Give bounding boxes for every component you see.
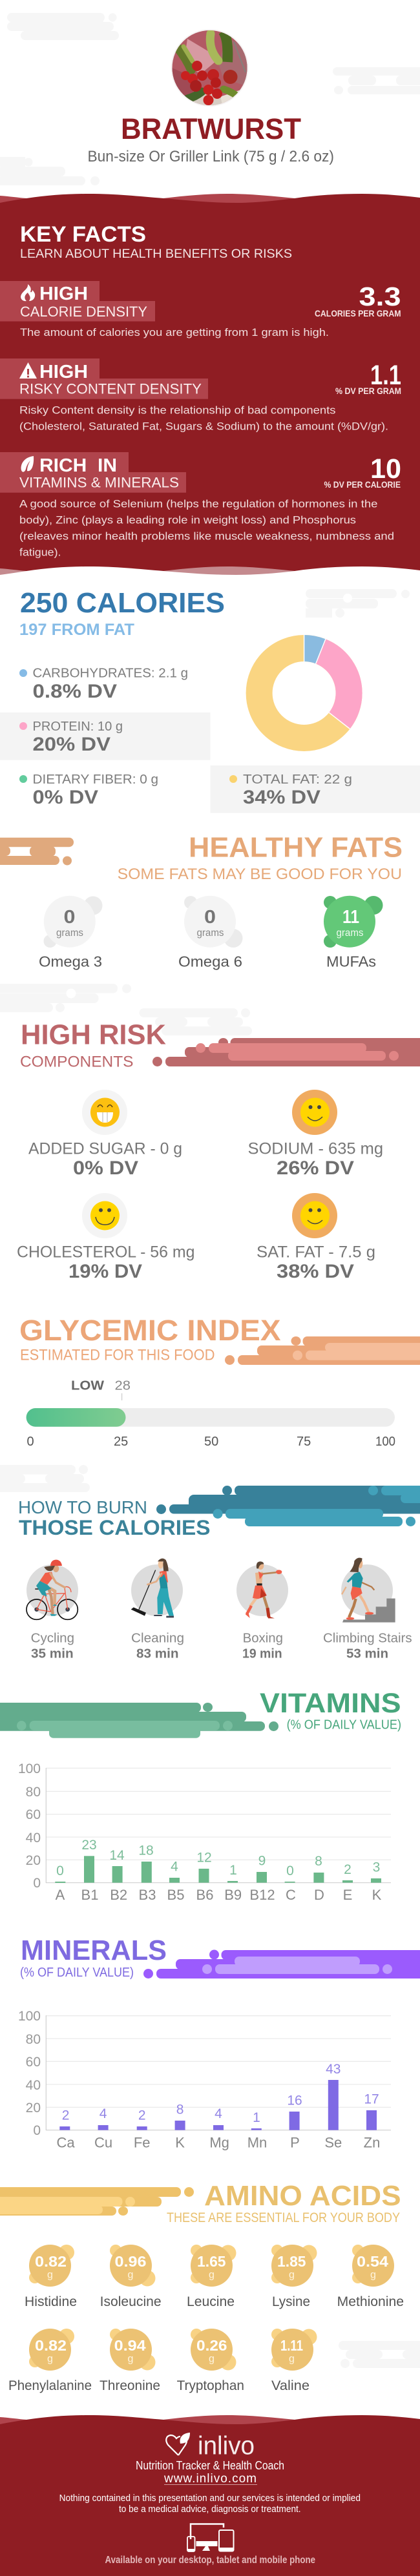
- fat: omega 6: 0: [204, 907, 216, 928]
- title: BRATWURST: [121, 112, 301, 145]
- activity: climbing stairs: Climbing Stairs: [323, 1632, 412, 1646]
- heading: minerals: MINERALS: [21, 1935, 167, 1966]
- bar chart: vitamins: 2: [344, 1862, 352, 1877]
- bar chart: minerals: K: [175, 2134, 185, 2150]
- bar chart: vitamins: B2: [110, 1887, 127, 1903]
- icon: smiling face: [300, 1201, 330, 1230]
- amino: valine: [271, 2329, 317, 2393]
- risky content density block: RISKY CONTENT DENSITY: [19, 381, 202, 397]
- calorie density block: HIGH: [39, 284, 88, 304]
- vitamins and minerals block: fatigue).: [19, 546, 61, 559]
- heading: those calories: THOSE CALORIES: [19, 1516, 211, 1539]
- vitamins and minerals block: (releaves minor health problems like muscle weakness, numbness and: [19, 530, 394, 543]
- bar chart: minerals: Se: [324, 2134, 342, 2150]
- activity: cycling: 35 min: [31, 1647, 74, 1661]
- bar chart: minerals: 17: [364, 2092, 379, 2107]
- amino: methionine: [337, 2245, 404, 2309]
- decorative cloud near amino acids: [339, 2341, 420, 2368]
- disclaimer: Nothing contained in this presentation and our services is intended or implied: [59, 2493, 361, 2504]
- bar chart: minerals: Fe: [134, 2134, 151, 2150]
- gauge: 0: [27, 1435, 34, 1449]
- activity: climbing stairs: [323, 1558, 412, 1661]
- bar chart: vitamins: 23: [81, 1838, 97, 1853]
- bar chart: vitamins: B12: [249, 1887, 275, 1903]
- bar chart: vitamins: 12: [196, 1851, 212, 1865]
- macronutrient: carbohydrates: 0.8% DV: [32, 681, 117, 702]
- macronutrient: dietary fiber: 0% DV: [32, 787, 98, 808]
- calorie density block: CALORIES PER GRAM: [315, 308, 401, 318]
- amino: lysine: g: [289, 2270, 295, 2281]
- macronutrient: total fat: TOTAL FAT: 22 g: [243, 773, 352, 787]
- bar chart: vitamins: B9: [224, 1887, 242, 1903]
- bar chart: minerals: 2: [138, 2108, 146, 2123]
- bar chart: vitamins: 80: [26, 1785, 41, 1800]
- bar chart: minerals: 60: [26, 2055, 41, 2070]
- amino: threonine: Threonine: [100, 2378, 160, 2393]
- subheading: (% OF DAILY VALUE): [287, 1718, 401, 1732]
- panel: calories and macronutrients: [0, 588, 420, 813]
- component: sodium: 26% DV: [277, 1158, 354, 1179]
- fat: MUFAs: 11: [342, 907, 359, 928]
- bar chart: vitamins: 40: [26, 1831, 41, 1845]
- calorie density block: CALORIE DENSITY: [20, 304, 147, 320]
- subheading: components: COMPONENTS: [20, 1054, 133, 1071]
- component: saturated fat: SAT. FAT - 7.5 g: [257, 1243, 375, 1262]
- bar chart: minerals: 4: [215, 2106, 222, 2121]
- disclaimer: [59, 2493, 361, 2515]
- macronutrient: protein: [0, 712, 211, 760]
- vitamins and minerals block: body), Zinc (plays a leading role in weight loss) and Phosphorus: [19, 514, 356, 526]
- decorative clouds above high risk: [0, 984, 252, 1035]
- amino: valine: g: [289, 2354, 295, 2365]
- icon: cyclist: [26, 1560, 78, 1619]
- panel: key facts: [0, 194, 420, 579]
- banner: amino acids: [0, 2187, 194, 2216]
- panel: how to burn those calories: [18, 1486, 420, 1661]
- heading: high risk: HIGH RISK: [21, 1020, 167, 1051]
- gauge: [26, 1379, 395, 1449]
- subheading: (% OF DAILY VALUE): [20, 1966, 134, 1980]
- subtitle: Bun-size Or Griller Link (75 g / 2.6 oz): [88, 148, 334, 165]
- subheading: calories from fat: 197 FROM FAT: [19, 621, 134, 639]
- panel: healthy fats: [0, 833, 403, 970]
- amino: tryptophan: 0.26: [196, 2337, 227, 2354]
- heading: key facts: KEY FACTS: [20, 222, 146, 247]
- bar chart: vitamins: 9: [258, 1854, 266, 1869]
- activity: boxing: 19 min: [242, 1647, 282, 1661]
- component: cholesterol: 19% DV: [68, 1261, 142, 1282]
- bar chart: vitamins: D: [314, 1887, 324, 1903]
- amino: leucine: Leucine: [187, 2294, 235, 2309]
- panel: high risk components: [17, 1020, 420, 1282]
- bar chart: minerals: Mg: [209, 2134, 229, 2150]
- heading: glycemic index: GLYCEMIC INDEX: [19, 1314, 281, 1347]
- heading: vitamins: VITAMINS: [260, 1688, 401, 1719]
- activity: cleaning: [131, 1559, 184, 1661]
- bar chart: vitamins: E: [343, 1887, 352, 1903]
- vitamins and minerals block: [0, 452, 401, 559]
- bar chart: minerals: 43: [326, 2062, 341, 2077]
- bar chart: minerals: 8: [176, 2103, 184, 2117]
- amino: leucine: 1.65: [197, 2253, 226, 2270]
- icon: smiling face: [300, 1098, 330, 1127]
- amino: tryptophan: [177, 2329, 244, 2393]
- panel: minerals: [18, 1935, 420, 2150]
- amino: histidine: 0.82: [35, 2253, 67, 2270]
- banner: high risk: [152, 1038, 420, 1066]
- amino: leucine: g: [209, 2270, 215, 2281]
- activity: cleaning: 83 min: [136, 1647, 178, 1661]
- risky density value: 1.1: [370, 360, 401, 391]
- bar chart: vitamins: B5: [167, 1887, 184, 1903]
- gauge: 25: [114, 1435, 128, 1449]
- macronutrient: total fat: 34% DV: [243, 787, 320, 808]
- icon: person on stairs: [342, 1558, 395, 1623]
- vitamins value: 10: [370, 453, 401, 484]
- bar chart: vitamins: B3: [139, 1887, 156, 1903]
- activity: cleaning: Cleaning: [131, 1632, 184, 1646]
- component: saturated fat: 38% DV: [277, 1261, 354, 1282]
- icon: leaf: [21, 456, 34, 472]
- bar chart: minerals: 0: [33, 2123, 41, 2138]
- subheading: ESTIMATED FOR THIS FOOD: [20, 1347, 215, 1364]
- bar chart: vitamins: K: [372, 1887, 382, 1903]
- gauge: 75: [297, 1435, 311, 1449]
- bar chart: vitamins: 0: [33, 1876, 41, 1891]
- banner: minerals: [143, 1949, 420, 1979]
- amino: leucine: [187, 2245, 236, 2309]
- macronutrient: dietary fiber: DIETARY FIBER: 0 g: [32, 773, 158, 787]
- bar chart: minerals: Mn: [247, 2134, 267, 2150]
- amino: tryptophan: Tryptophan: [177, 2378, 244, 2393]
- vitamins and minerals block: % DV PER CALORIE: [324, 479, 401, 490]
- banner: vitamins: [0, 1703, 278, 1738]
- macronutrient: total fat: [211, 765, 420, 813]
- bar chart: vitamins: 8: [315, 1854, 322, 1869]
- icon: grinning face: [90, 1098, 120, 1127]
- activity: climbing stairs: 53 min: [346, 1647, 388, 1661]
- component: added sugar: 0% DV: [73, 1158, 138, 1179]
- amino: isoleucine: [100, 2245, 162, 2309]
- bar chart: minerals: 40: [26, 2078, 41, 2093]
- calorie density block: [0, 281, 401, 338]
- gauge: 50: [204, 1435, 218, 1449]
- bar chart: minerals: 80: [26, 2032, 41, 2047]
- bar chart: minerals: [18, 2009, 391, 2150]
- amino: phenylalanine: 0.82: [35, 2337, 67, 2354]
- bar chart: vitamins: B1: [81, 1887, 98, 1903]
- gauge: 100: [375, 1435, 395, 1449]
- amino: isoleucine: Isoleucine: [100, 2294, 162, 2309]
- bar chart: vitamins: 0: [286, 1864, 294, 1878]
- amino: lysine: [271, 2245, 317, 2309]
- icon: warning triangle: [19, 362, 37, 379]
- fat: omega 3: Omega 3: [39, 953, 102, 970]
- amino: methionine: g: [370, 2270, 376, 2281]
- amino: histidine: Histidine: [25, 2294, 77, 2309]
- gauge: 28: [115, 1379, 131, 1393]
- macronutrient: protein: PROTEIN: 10 g: [32, 720, 123, 734]
- fat: MUFAs: MUFAs: [326, 953, 376, 970]
- banner: burn calories: [156, 1486, 420, 1526]
- bar chart: vitamins: 3: [373, 1860, 380, 1875]
- logo text: inlivo: [198, 2432, 255, 2460]
- bar chart: vitamins: 1: [229, 1863, 237, 1878]
- calorie density value: 3.3: [359, 282, 401, 311]
- macronutrient: carbohydrates: CARBOHYDRATES: 2.1 g: [32, 667, 188, 681]
- banner: glycemic index: [225, 1336, 420, 1365]
- component: added sugar: ADDED SUGAR - 0 g: [28, 1140, 182, 1158]
- bar chart: vitamins: 18: [138, 1844, 154, 1858]
- amino: histidine: g: [47, 2270, 53, 2281]
- decorative cloud above burn section: [0, 1465, 90, 1492]
- availability note: Available on your desktop, tablet and mobile phone: [105, 2555, 315, 2566]
- risky content density block: [0, 358, 401, 433]
- amino: threonine: g: [128, 2354, 133, 2365]
- amino: phenylalanine: g: [47, 2354, 53, 2365]
- heading: calories: 250 CALORIES: [20, 588, 225, 619]
- food photo: [171, 29, 248, 107]
- bar chart: vitamins: 60: [26, 1807, 41, 1822]
- gauge: LOW: [71, 1379, 104, 1393]
- bar chart: vitamins: 20: [26, 1853, 41, 1868]
- bar chart: minerals: P: [290, 2134, 300, 2150]
- donut chart: [259, 635, 350, 738]
- panel: glycemic index: [19, 1314, 420, 1449]
- calorie density block: The amount of calories you are getting from 1 gram is high.: [20, 326, 329, 338]
- amino: methionine: Methionine: [337, 2294, 404, 2309]
- icon: devices: [187, 2524, 234, 2551]
- logo: heart and leaf: [166, 2433, 190, 2455]
- risky content density block: (Cholesterol, Saturated Fat, Sugars & Sodium) to the amount (%DV/gr).: [19, 421, 388, 433]
- component: cholesterol: [17, 1193, 194, 1282]
- tagline: Nutrition Tracker & Health Coach: [136, 2458, 284, 2472]
- amino: lysine: 1.85: [277, 2253, 306, 2270]
- bar chart: vitamins: B6: [196, 1887, 213, 1903]
- amino: threonine: 0.94: [114, 2337, 146, 2354]
- bar chart: vitamins: 100: [18, 1761, 41, 1776]
- component: saturated fat: [257, 1193, 375, 1282]
- macronutrient: protein: 20% DV: [32, 734, 110, 755]
- fat: MUFAs: [324, 896, 383, 970]
- bar chart: vitamins: A: [56, 1887, 65, 1903]
- amino: phenylalanine: Phenylalanine: [8, 2378, 92, 2393]
- vitamins and minerals block: A good source of Selenium (helps the regulation of hormones in the: [19, 498, 377, 510]
- component: cholesterol: CHOLESTEROL - 56 mg: [17, 1243, 194, 1262]
- subheading: LEARN ABOUT HEALTH BENEFITS OR RISKS: [20, 247, 292, 261]
- bar chart: minerals: Cu: [94, 2134, 112, 2150]
- icon: boxer: [246, 1561, 282, 1618]
- component: added sugar: [28, 1090, 182, 1179]
- activity: cycling: [26, 1560, 78, 1661]
- fat: omega 6: grams: [196, 928, 224, 939]
- subheading: SOME FATS MAY BE GOOD FOR YOU: [118, 866, 402, 883]
- amino: lysine: Lysine: [272, 2294, 310, 2309]
- heading: healthy fats: HEALTHY FATS: [189, 833, 403, 864]
- amino: threonine: [100, 2329, 160, 2393]
- fat: omega 3: 0: [63, 907, 75, 928]
- macronutrient: dietary fiber: [19, 773, 158, 808]
- risky content density block: % DV PER GRAM: [335, 386, 401, 396]
- bar chart: vitamins: 0: [56, 1864, 64, 1878]
- bar chart: vitamins: 14: [109, 1848, 125, 1863]
- decorative cloud near calories: [306, 589, 410, 618]
- fat: omega 3: grams: [56, 928, 83, 939]
- icon: smiling face wide: [90, 1201, 120, 1230]
- component: sodium: SODIUM - 635 mg: [248, 1140, 383, 1158]
- banner: healthy fats: [0, 838, 74, 866]
- bar chart: minerals: Ca: [57, 2134, 75, 2150]
- bar chart: vitamins: C: [286, 1887, 296, 1903]
- fat: omega 6: Omega 6: [178, 953, 242, 970]
- amino: histidine: [25, 2245, 77, 2309]
- bar chart: minerals: 4: [100, 2106, 107, 2121]
- amino: tryptophan: g: [209, 2354, 215, 2365]
- panel: vitamins: [0, 1688, 401, 1903]
- amino: isoleucine: 0.96: [115, 2253, 146, 2270]
- panel: footer: [0, 2415, 420, 2576]
- bar chart: minerals: 1: [253, 2110, 260, 2125]
- bar chart: minerals: 2: [62, 2108, 69, 2123]
- component: sodium: [248, 1090, 383, 1179]
- activity: boxing: [236, 1561, 288, 1661]
- bar chart: minerals: Zn: [364, 2134, 380, 2150]
- amino: valine: Valine: [271, 2378, 310, 2393]
- bar chart: minerals: 20: [26, 2101, 41, 2115]
- heading: amino acids: AMINO ACIDS: [204, 2181, 401, 2212]
- heading: how to burn: HOW TO BURN: [18, 1497, 147, 1517]
- activity: boxing: Boxing: [243, 1632, 283, 1646]
- icon: flame: [21, 284, 35, 301]
- fat: omega 3: [39, 896, 102, 970]
- bar chart: vitamins: [18, 1761, 391, 1903]
- bar chart: minerals: 16: [287, 2093, 302, 2108]
- risky content density block: HIGH: [39, 362, 88, 382]
- website link: www.inlivo.com: [163, 2472, 257, 2486]
- vitamins and minerals block: VITAMINS & MINERALS: [19, 475, 179, 491]
- amino: methionine: 0.54: [357, 2253, 388, 2270]
- decorative clouds at top: [0, 13, 420, 185]
- panel: amino acids: [0, 2181, 404, 2393]
- activity: cycling: Cycling: [31, 1632, 74, 1646]
- fat: MUFAs: grams: [336, 928, 364, 939]
- fat: omega 6: [178, 896, 243, 970]
- icon: person sweeping: [131, 1559, 174, 1617]
- amino: phenylalanine: [8, 2329, 92, 2393]
- vitamins and minerals block: RICH IN: [39, 455, 117, 476]
- amino: valine: 1.11: [280, 2337, 303, 2354]
- risky content density block: Risky Content density is the relationship of bad components: [19, 404, 336, 417]
- amino: isoleucine: g: [128, 2270, 133, 2281]
- macronutrient: carbohydrates: [19, 667, 188, 702]
- bar chart: minerals: 100: [18, 2009, 41, 2024]
- bar chart: vitamins: 4: [171, 1860, 178, 1875]
- disclaimer: to be a medical advice, diagnosis or treatment.: [119, 2504, 301, 2515]
